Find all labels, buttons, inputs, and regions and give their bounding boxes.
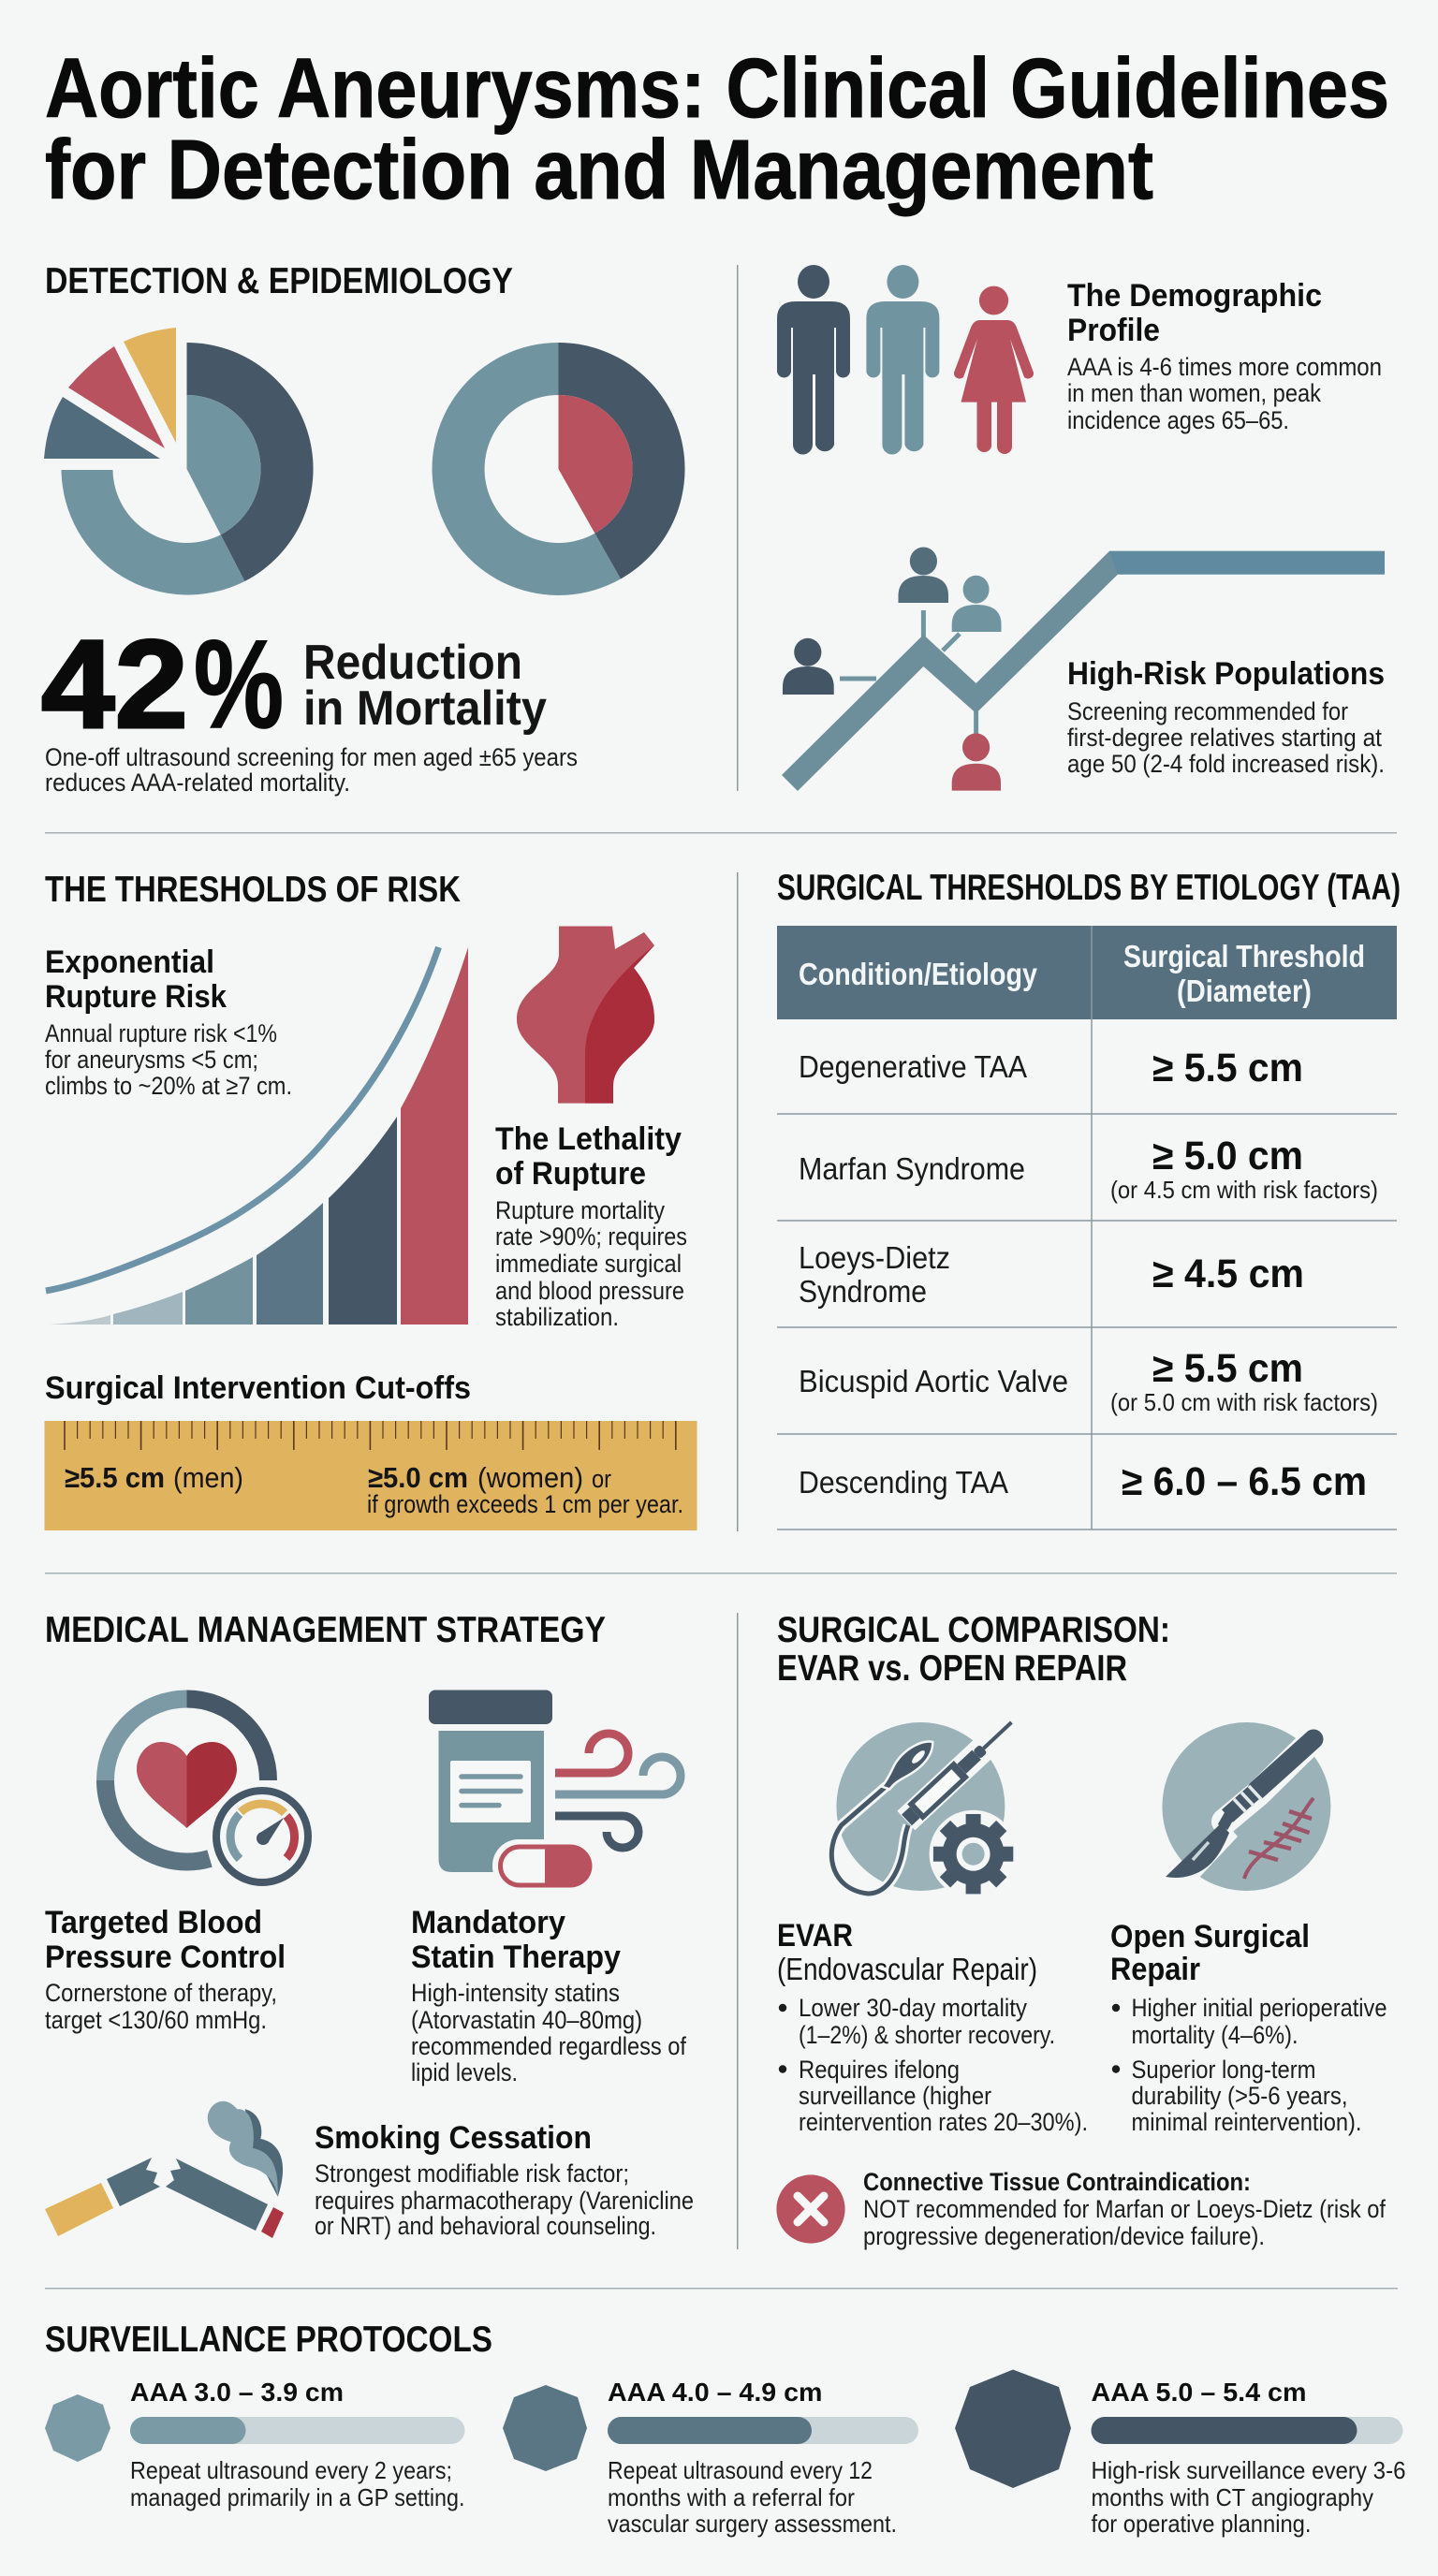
ruler: cut-off values: (men) bbox=[173, 1461, 243, 1494]
callout: connective tissue contraindication: progressive degeneration/device failure). bbox=[863, 2222, 1265, 2250]
table row: loeys-dietz syndrome bbox=[799, 1240, 1304, 1309]
icon: red woman bbox=[954, 286, 1034, 454]
heading: medical management strategy: MEDICAL MANAGEMENT STRATEGY bbox=[45, 1610, 606, 1650]
heading: surgical comparison: SURGICAL COMPARISON: bbox=[777, 1610, 1170, 1650]
icon: family risk network bbox=[782, 547, 1385, 791]
table row: bicuspid aortic valve: ≥ 5.5 cm bbox=[1152, 1346, 1303, 1391]
icon: aneurysm bbox=[517, 927, 654, 1104]
heading: surveillance protocols: SURVEILLANCE PROTOCOLS bbox=[45, 2320, 492, 2360]
panel: detection and epidemiology bbox=[41, 261, 685, 797]
protocol: AAA 3.0-3.9 cm: managed primarily in a GP setting. bbox=[130, 2483, 464, 2511]
list: open repair points: Higher initial perioperative bbox=[1131, 1994, 1387, 2022]
text: lethality description: stabilization. bbox=[495, 1303, 619, 1331]
heading: open surgical repair: Repair bbox=[1110, 1952, 1200, 1987]
list: open repair points: mortality (4–6%). bbox=[1131, 2021, 1298, 2049]
table row: marfan syndrome: Marfan Syndrome bbox=[799, 1151, 1025, 1186]
ruler: cut-off values: if growth exceeds 1 cm per year. bbox=[367, 1490, 683, 1518]
table header: Condition/Etiology bbox=[799, 957, 1038, 991]
list: open repair points: Superior long-term bbox=[1131, 2056, 1316, 2084]
heading: mandatory statin therapy: Statin Therapy bbox=[411, 1939, 621, 1975]
heading: surgical comparison: EVAR vs. OPEN REPAIR bbox=[777, 1648, 1127, 1689]
heading: exponential rupture risk: Exponential bbox=[45, 944, 214, 980]
text: high-risk description bbox=[1067, 697, 1385, 778]
heading: the thresholds of risk: THE THRESHOLDS OF RISK bbox=[45, 870, 461, 910]
table row: bicuspid aortic valve bbox=[799, 1346, 1378, 1416]
stat: 42 percent: % bbox=[194, 615, 284, 754]
panel: surgical comparison bbox=[776, 1610, 1387, 2250]
heading: the lethality of rupture: of Rupture bbox=[495, 1156, 646, 1192]
text: smoking description: or NRT) and behavioral counseling. bbox=[315, 2212, 656, 2240]
list: open repair points: durability (>5-6 years, bbox=[1131, 2082, 1348, 2110]
table row: degenerative TAA bbox=[799, 1046, 1303, 1090]
text: demographic description: in men than women, peak bbox=[1067, 379, 1321, 407]
text: statin description: recommended regardless of bbox=[411, 2032, 686, 2060]
list: EVAR points: Requires ifelong bbox=[799, 2056, 960, 2084]
text: blood pressure description: target <130/60 mmHg. bbox=[45, 2006, 267, 2034]
text: screening description: One-off ultrasound screening for men aged ±65 years bbox=[45, 743, 578, 771]
icon: contraindication X bbox=[776, 2174, 845, 2244]
icon: broken cigarette and smoke bbox=[45, 2101, 284, 2238]
text: statin description: (Atorvastatin 40–80mg) bbox=[411, 2006, 642, 2034]
text: rupture risk description bbox=[45, 1019, 292, 1100]
text: statin description bbox=[411, 1979, 686, 2086]
table row: loeys-dietz syndrome: ≥ 4.5 cm bbox=[1152, 1251, 1304, 1296]
icon: statin bottle, pill and air swirls bbox=[429, 1690, 681, 1893]
text: statin description: lipid levels. bbox=[411, 2058, 518, 2086]
text: rupture risk description: for aneurysms <5 cm; bbox=[45, 1046, 258, 1074]
protocol: AAA 5.0-5.4 cm: AAA 5.0 – 5.4 cm bbox=[1092, 2378, 1307, 2407]
list: EVAR points bbox=[779, 1994, 1088, 2136]
panel: thresholds of risk bbox=[45, 870, 697, 1530]
text: screening description bbox=[45, 743, 578, 797]
table row: descending TAA: Descending TAA bbox=[799, 1465, 1008, 1500]
heading: open surgical repair: Open Surgical bbox=[1110, 1919, 1310, 1954]
ruler: cut-off values: ≥5.0 cm bbox=[368, 1461, 468, 1494]
heading: exponential rupture risk bbox=[45, 944, 227, 1015]
protocol: AAA 5.0-5.4 cm bbox=[955, 2370, 1406, 2538]
table row: marfan syndrome: (or 4.5 cm with risk factors) bbox=[1110, 1176, 1378, 1204]
text: smoking description: requires pharmacotherapy (Varenicline bbox=[315, 2187, 694, 2215]
heading: detection and epidemiology: DETECTION & EPIDEMIOLOGY bbox=[45, 261, 513, 301]
protocol: AAA 4.0-4.9 cm: vascular surgery assessment. bbox=[608, 2510, 897, 2538]
text: statin description: High-intensity statins bbox=[411, 1979, 620, 2007]
icon: blood pressure heart and gauge bbox=[105, 1699, 316, 1891]
table row: bicuspid aortic valve: (or 5.0 cm with risk factors) bbox=[1110, 1388, 1378, 1416]
icon: EVAR catheter, syringe and gear bbox=[831, 1713, 1020, 1898]
list: EVAR points: Lower 30-day mortality bbox=[799, 1994, 1027, 2022]
text: screening description: reduces AAA-related mortality. bbox=[45, 768, 350, 797]
list: EVAR points: (1–2%) & shorter recovery. bbox=[799, 2021, 1055, 2049]
heading: targeted blood pressure control: Targeted Blood bbox=[45, 1905, 262, 1940]
heading: targeted blood pressure control: Pressure Control bbox=[45, 1939, 286, 1975]
text: blood pressure description bbox=[45, 1979, 277, 2034]
heading: EVAR bbox=[777, 1918, 1037, 1986]
heading: high-risk populations: High-Risk Populations bbox=[1067, 656, 1385, 692]
heading: the demographic profile: The Demographic bbox=[1067, 278, 1322, 314]
ruler: cut-off values: (women) bbox=[477, 1461, 583, 1494]
heading: surgical intervention cut-offs: Surgical Intervention Cut-offs bbox=[45, 1370, 471, 1406]
panel: medical management strategy bbox=[45, 1610, 694, 2240]
callout: connective tissue contraindication: Connective Tissue Contraindication: bbox=[863, 2168, 1251, 2196]
list: open repair points: minimal reintervention). bbox=[1131, 2108, 1361, 2136]
heading: smoking cessation: Smoking Cessation bbox=[315, 2120, 592, 2156]
protocol: AAA 5.0-5.4 cm: months with CT angiography bbox=[1092, 2483, 1373, 2511]
protocol: AAA 4.0-4.9 cm: Repeat ultrasound every 12 bbox=[608, 2456, 873, 2484]
chart: exploded donut bbox=[44, 328, 314, 595]
text: lethality description bbox=[495, 1196, 687, 1331]
text: rupture risk description: Annual rupture risk <1% bbox=[45, 1019, 277, 1047]
table row: loeys-dietz syndrome: Loeys-Dietz bbox=[799, 1240, 950, 1275]
heading: targeted blood pressure control bbox=[45, 1905, 286, 1975]
heading: the lethality of rupture bbox=[495, 1121, 682, 1192]
ruler: cut-off values: ≥5.5 cm bbox=[65, 1461, 165, 1494]
heading: the demographic profile: Profile bbox=[1067, 313, 1160, 348]
heading: exponential rupture risk: Rupture Risk bbox=[45, 979, 227, 1015]
stat: 42 percent bbox=[41, 615, 284, 754]
protocol: AAA 4.0-4.9 cm bbox=[503, 2378, 918, 2538]
list: EVAR points: surveillance (higher bbox=[799, 2082, 991, 2110]
table header: (Diameter) bbox=[1177, 973, 1312, 1008]
heading: surgical comparison bbox=[777, 1610, 1170, 1689]
heading: mandatory statin therapy bbox=[411, 1905, 621, 1975]
text: smoking description: Strongest modifiable risk factor; bbox=[315, 2159, 629, 2188]
panel: demographic profile bbox=[777, 265, 1382, 455]
heading: the demographic profile bbox=[1067, 278, 1322, 348]
ruler: cut-off values: or bbox=[592, 1465, 611, 1493]
chart: donut with red wedge bbox=[433, 343, 685, 595]
heading: the lethality of rupture: The Lethality bbox=[495, 1121, 682, 1157]
table row: bicuspid aortic valve: Bicuspid Aortic Valve bbox=[799, 1364, 1068, 1398]
table row: marfan syndrome: ≥ 5.0 cm bbox=[1152, 1134, 1303, 1178]
list: open repair points bbox=[1112, 1994, 1387, 2136]
protocol: AAA 3.0-3.9 cm bbox=[45, 2378, 464, 2511]
panel: surgical thresholds by etiology table bbox=[777, 868, 1401, 1530]
protocol: AAA 3.0-3.9 cm: AAA 3.0 – 3.9 cm bbox=[130, 2378, 344, 2407]
stat: 42 percent: 42 bbox=[41, 615, 188, 754]
list: EVAR points: reintervention rates 20–30%). bbox=[799, 2108, 1088, 2136]
text: rupture risk description: climbs to ~20% at ≥7 cm. bbox=[45, 1072, 292, 1100]
text: lethality description: and blood pressure bbox=[495, 1277, 684, 1305]
table row: marfan syndrome bbox=[799, 1134, 1378, 1204]
heading: mandatory statin therapy: Mandatory bbox=[411, 1905, 565, 1940]
heading: EVAR: EVAR bbox=[777, 1918, 853, 1954]
text: high-risk description: first-degree relatives starting at bbox=[1067, 724, 1382, 752]
stat label: reduction in mortality bbox=[303, 636, 547, 736]
icon: scalpel and sutured incision bbox=[1159, 1722, 1330, 1896]
text: lethality description: immediate surgical bbox=[495, 1250, 682, 1278]
table row: loeys-dietz syndrome: Syndrome bbox=[799, 1274, 927, 1309]
text: smoking description bbox=[315, 2159, 694, 2240]
text: demographic description bbox=[1067, 353, 1382, 434]
text: blood pressure description: Cornerstone of therapy, bbox=[45, 1979, 277, 2007]
text: demographic description: AAA is 4-6 times more common bbox=[1067, 353, 1382, 381]
icon: dark man bbox=[777, 265, 850, 455]
title: for Detection and Management bbox=[45, 124, 1153, 217]
panel: surveillance protocols bbox=[45, 2320, 1406, 2538]
stat label: reduction in mortality: Reduction bbox=[303, 636, 522, 690]
table row: descending TAA: ≥ 6.0 – 6.5 cm bbox=[1122, 1459, 1367, 1504]
protocol: AAA 4.0-4.9 cm: months with a referral for bbox=[608, 2483, 855, 2511]
table row: degenerative TAA: ≥ 5.5 cm bbox=[1152, 1046, 1303, 1090]
table row: descending TAA bbox=[799, 1459, 1367, 1504]
text: lethality description: Rupture mortality bbox=[495, 1196, 665, 1224]
protocol: AAA 4.0-4.9 cm: AAA 4.0 – 4.9 cm bbox=[608, 2378, 822, 2407]
protocol: AAA 3.0-3.9 cm: Repeat ultrasound every 2 years; bbox=[130, 2456, 452, 2484]
chart: exponential risk curve bars bbox=[46, 947, 468, 1325]
heading: open surgical repair bbox=[1110, 1919, 1310, 1987]
heading: EVAR: (Endovascular Repair) bbox=[777, 1952, 1037, 1986]
text: lethality description: rate >90%; requires bbox=[495, 1222, 687, 1251]
title bbox=[45, 42, 1389, 217]
stat label: reduction in mortality: in Mortality bbox=[303, 681, 547, 736]
protocol: AAA 5.0-5.4 cm: for operative planning. bbox=[1092, 2510, 1311, 2538]
text: high-risk description: age 50 (2-4 fold increased risk). bbox=[1067, 750, 1385, 778]
protocol: AAA 5.0-5.4 cm: High-risk surveillance every 3-6 bbox=[1092, 2456, 1406, 2484]
table header bbox=[777, 926, 1397, 1019]
callout: connective tissue contraindication bbox=[863, 2168, 1386, 2250]
table row: degenerative TAA: Degenerative TAA bbox=[799, 1049, 1027, 1084]
text: high-risk description: Screening recommended for bbox=[1067, 697, 1348, 725]
ruler: cut-off values bbox=[45, 1421, 697, 1530]
icon: teal man bbox=[866, 265, 939, 455]
table header: Surgical Threshold bbox=[1123, 939, 1365, 973]
text: demographic description: incidence ages 65–65. bbox=[1067, 406, 1289, 434]
panel: high-risk populations bbox=[782, 547, 1385, 791]
